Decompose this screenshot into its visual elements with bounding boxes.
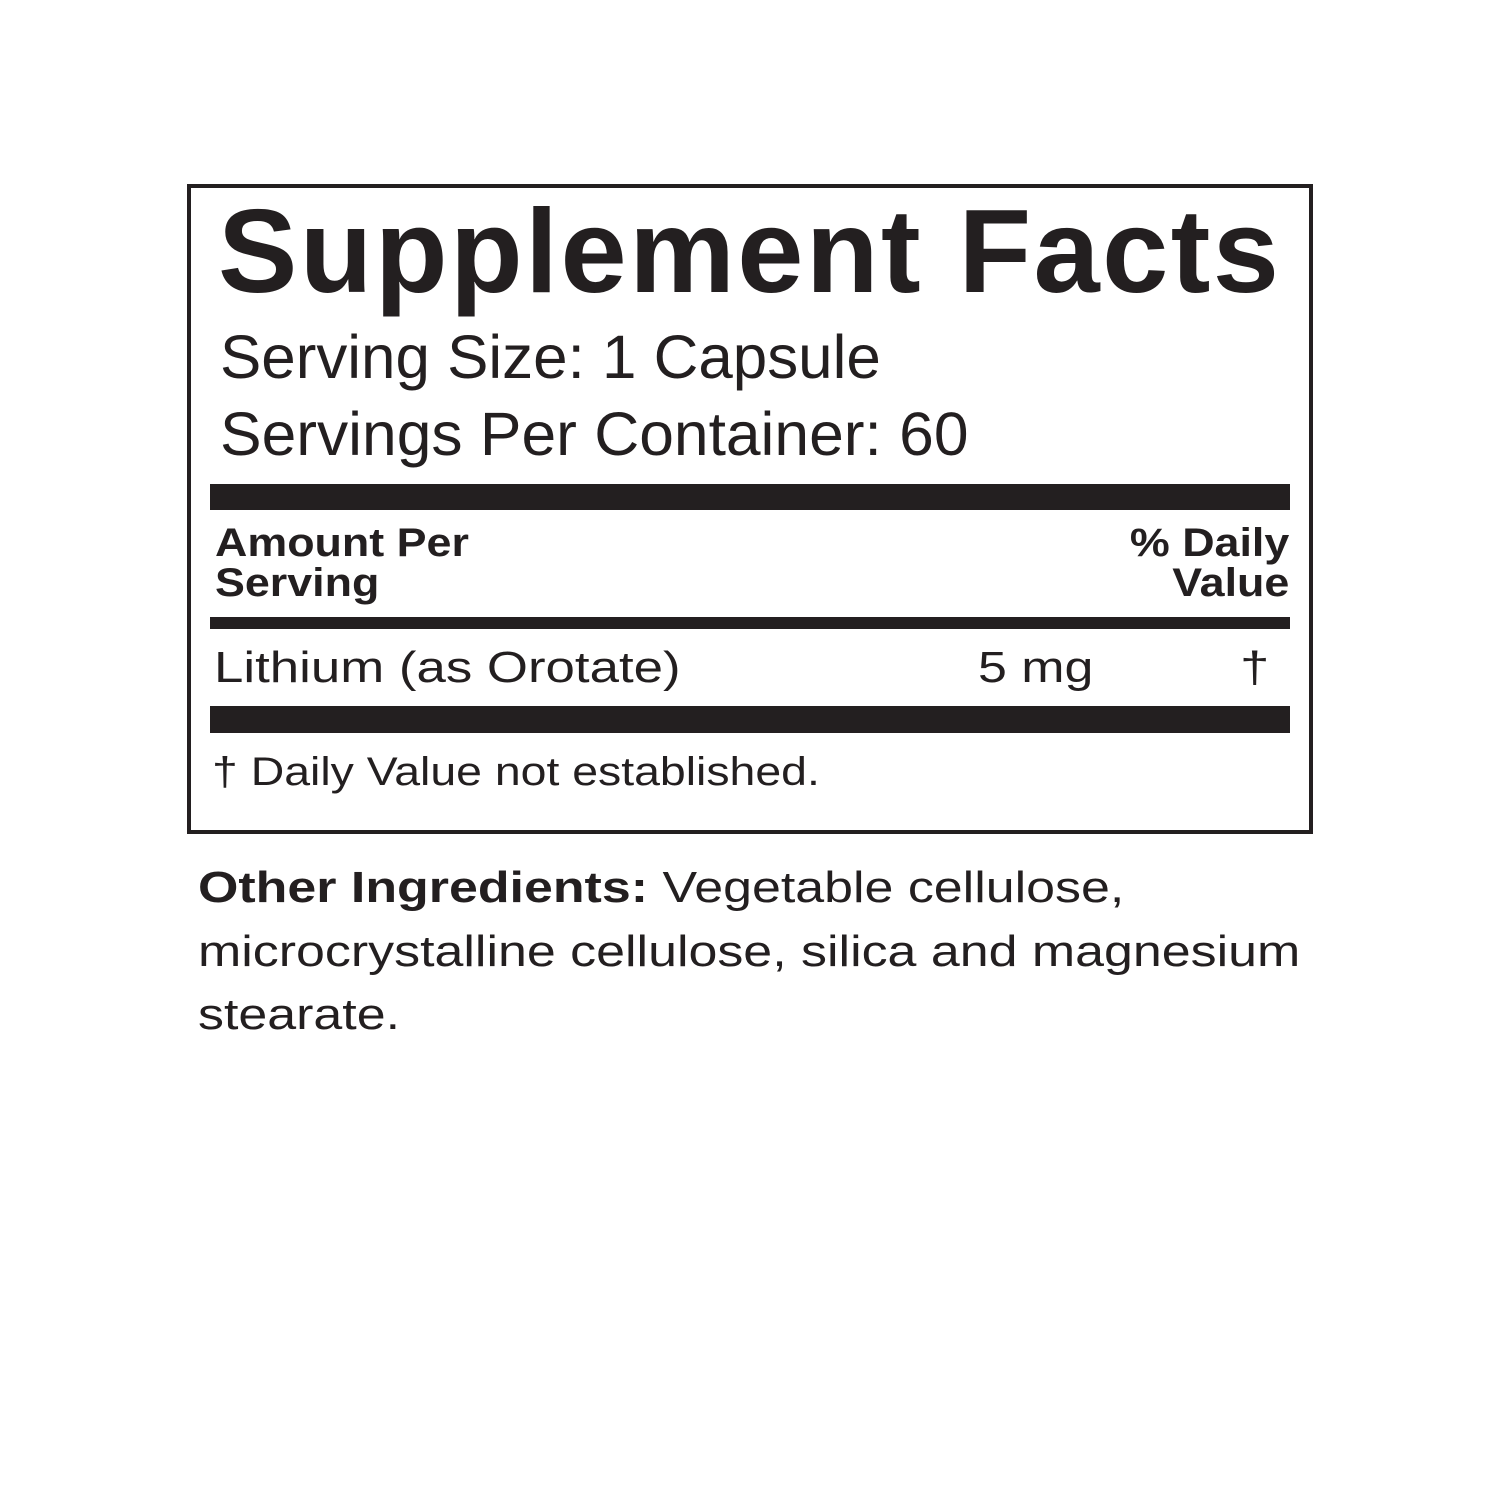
divider bar medium <box>210 617 1290 629</box>
text: servings per container: Servings Per Container: 60 <box>220 400 969 468</box>
row: lithium: Lithium (as Orotate) <box>214 643 681 692</box>
panel: supplement facts box <box>187 184 1313 834</box>
text block: other ingredients: microcrystalline cellulose, silica and magnesium <box>198 926 1300 976</box>
text block: other ingredients <box>198 863 1300 1039</box>
header: daily value <box>1130 521 1289 605</box>
text block: other ingredients: Other Ingredients: Vegetable cellulose, <box>198 863 1124 912</box>
row: lithium: 5 mg <box>978 643 1093 692</box>
header: amount per serving <box>215 521 469 605</box>
header: daily value: Value <box>1172 561 1289 605</box>
header: amount per serving: Serving <box>215 561 379 605</box>
row: lithium: † <box>1240 643 1269 692</box>
footnote: † Daily Value not established. <box>212 750 820 794</box>
divider bar thick <box>210 706 1290 733</box>
text: serving size: Serving Size: 1 Capsule <box>220 323 881 391</box>
divider bar thick <box>210 484 1290 510</box>
header: daily value: % Daily <box>1130 521 1289 565</box>
row: lithium <box>214 643 1269 692</box>
header: amount per serving: Amount Per <box>215 521 469 565</box>
text block: other ingredients: stearate. <box>198 990 400 1039</box>
title: Supplement Facts <box>218 185 1281 318</box>
